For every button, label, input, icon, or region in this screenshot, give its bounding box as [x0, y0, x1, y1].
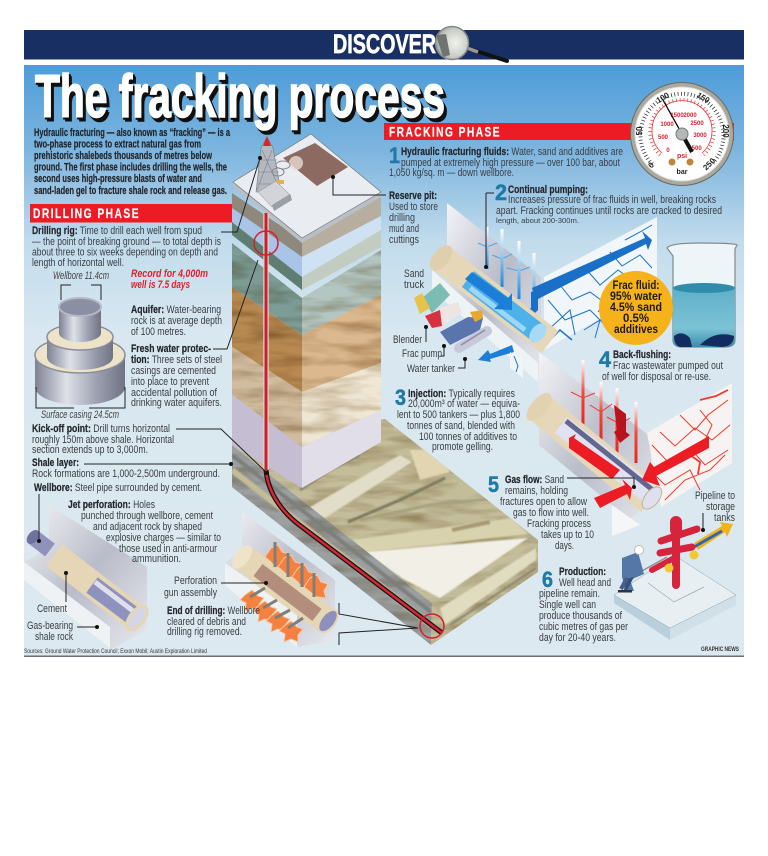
panel bottom rule: [24, 656, 744, 657]
text: drilling rig: Drilling rig: Time to drill each well from spud: [32, 225, 202, 237]
pressure gauge: 2500: [690, 121, 704, 127]
step 3: 20,000m³ of water — equiva-: [408, 398, 520, 410]
pressure gauge: 100: [655, 90, 671, 105]
shale block: [232, 419, 538, 645]
header bar: DISCOVER: [333, 29, 436, 59]
leader lines: tower: [84, 156, 418, 645]
text: aquifer: Aquifer: Water-bearing: [131, 304, 221, 316]
text: pipeline to storage tanks: storage: [706, 501, 735, 513]
header bar: [24, 29, 744, 60]
icon: frac pump: Frac pump: [402, 348, 442, 360]
text: drilling rig: — the point of breaking ground — to total depth is: [32, 236, 221, 248]
step 3: lent to 500 tankers — plus 1,800: [397, 409, 520, 421]
text: fresh water protection: [131, 343, 222, 409]
upper strata: [232, 193, 381, 290]
heading: drilling phase: DRILLING PHASE: [33, 205, 140, 221]
step 6: Well head and: [559, 577, 611, 589]
fracking diagram: blue pumping: [425, 193, 657, 382]
step 2: length, about 200-300m.: [496, 216, 579, 225]
step 5: takes up to 10: [541, 529, 594, 541]
step 5: 5: [488, 472, 499, 497]
text: aquifer: [131, 304, 222, 338]
pressure gauge: 250: [701, 156, 718, 172]
text: end of drilling: drilling rig removed.: [167, 626, 242, 638]
trucks: [393, 268, 487, 375]
step 5: gas to flow into well.: [513, 507, 589, 519]
pressure gauge: 150: [695, 91, 712, 105]
text: jet perforation: [68, 499, 221, 565]
step 6: day for 20-40 years.: [539, 632, 616, 644]
text: fresh water protection: accidental pollution of: [131, 387, 218, 399]
wellbore cutaway diagram: [24, 494, 151, 650]
perforation gun diagram: [164, 512, 342, 647]
text: fresh water protection: tion: Three sets of steel: [131, 354, 222, 366]
pressure gauge: 0: [666, 148, 670, 154]
text: fresh water protection: drinking water aquifers.: [131, 397, 222, 409]
callout: frac fluid: [599, 271, 673, 345]
step 6: pipeline remain.: [539, 588, 600, 600]
text: jet perforation: and adjacent rock by shaped: [93, 521, 202, 533]
step 5: fractures open to allow: [500, 496, 587, 508]
text: reserve pit: mud and: [389, 223, 419, 235]
text: kick-off point: roughly 150m above shale. Horizontal: [32, 434, 174, 446]
callout: frac fluid: 0.5%: [623, 311, 649, 325]
fractured rock panel red: [647, 383, 732, 507]
text: reserve pit: drilling: [389, 212, 415, 224]
step 1: 1,050 kg/sq. m — down wellbore.: [389, 167, 514, 179]
step 6: produce thousands of: [539, 610, 623, 622]
text: drilling rig: about three to six weeks depending on depth and: [32, 246, 218, 258]
step 1: 1: [389, 143, 400, 168]
casing diagram: Surface casing 24.5cm: [41, 409, 119, 421]
step 6: Production:: [559, 566, 606, 578]
step 2: Increases pressure of frac fluids in well, breaking rocks: [508, 194, 716, 206]
step 3: 3: [395, 385, 406, 410]
intro text: two-phase process to extract natural gas from: [34, 138, 201, 150]
step 4: 4: [599, 347, 612, 372]
icon: water tanker: Water tanker: [407, 363, 455, 375]
step 1: [389, 143, 623, 179]
intro text: Hydraulic fracturing — also known as “fracking” — is a: [34, 127, 231, 139]
pressure gauge: bar: [677, 169, 688, 176]
text: pipeline to storage tanks: [695, 490, 735, 524]
text: reserve pit: Reserve pit:: [389, 190, 437, 202]
icon: sand truck: Sand: [404, 268, 424, 280]
text: jet perforation: those used in anti-armour: [119, 543, 217, 555]
callout: frac fluid: 4.5% sand: [610, 300, 662, 314]
main panel background: [24, 65, 744, 656]
heading: drilling phase: [30, 204, 233, 222]
text: pipeline to storage tanks: Pipeline to: [695, 490, 735, 502]
step 6: cubic metres of gas per: [539, 621, 628, 633]
step 2: [495, 180, 722, 225]
lower strata: [232, 243, 381, 488]
text: drilling rig: [32, 225, 221, 269]
text: jet perforation: explosive charges — similar to: [106, 532, 221, 544]
step 4: Frac wastewater pumped out: [613, 360, 723, 372]
text: end of drilling: [167, 605, 260, 638]
text: shale layer: Shale layer:: [32, 457, 79, 469]
intro text: prehistoric shalebeds thousands of metres below: [34, 150, 212, 162]
step 6: Single well can: [539, 599, 596, 611]
text: shale layer: [32, 457, 220, 480]
pressure gauge: 50: [635, 126, 644, 135]
callout: frac fluid: additives: [614, 322, 658, 336]
heading: fracking phase: FRACKING PHASE: [389, 124, 501, 140]
step 3: tonnes of sand, blended with: [407, 420, 515, 432]
step 3: promote gelling.: [432, 441, 493, 453]
callout circle: aquifer: [254, 231, 278, 255]
step 4: [599, 347, 723, 383]
icon: magnifying glass: [436, 26, 507, 61]
callout: record: [131, 268, 208, 291]
well bore line: [266, 213, 442, 633]
text: reserve pit: cuttings: [389, 234, 419, 246]
icon: blender: Blender: [393, 334, 422, 346]
intro text: ground. The first phase includes drilling the wells, the: [34, 162, 227, 174]
pressure gauge: 2000: [683, 113, 697, 119]
pressure gauge: 3500: [688, 146, 702, 152]
text: kick-off point: section extends up to 3,000m.: [32, 444, 148, 456]
heading: fracking phase: [384, 123, 734, 140]
step 3: 100 tonnes of additives to: [419, 431, 517, 443]
step 1: pumped at extremely high pressure — over 100 bar, about: [401, 157, 620, 169]
step 3: [395, 385, 520, 453]
text: wellbore: Wellbore: Steel pipe surrounded by cement.: [34, 482, 202, 494]
text: jet perforation: punched through wellbore, cement: [81, 510, 213, 522]
step 1: Hydraulic fracturing fluids: Water, sand and additives are: [401, 146, 623, 158]
callout: frac fluid: Frac fluid:: [612, 278, 660, 292]
step 5: remains, holding: [505, 485, 568, 497]
icon: sand truck: truck: [404, 279, 424, 291]
step 2: Continual pumping:: [508, 184, 588, 196]
pressure gauge: 0: [646, 160, 656, 170]
step 4: Back-flushing:: [613, 349, 671, 361]
drilling rig: [256, 136, 292, 211]
intro text: sand-laden gel to fracture shale rock and release gas.: [34, 185, 227, 197]
text: fresh water protection: Fresh water protec-: [131, 343, 211, 355]
text: fresh water protection: into place to prevent: [131, 376, 209, 388]
pressure gauge: 1500: [670, 113, 684, 119]
pressure gauge: 3000: [693, 133, 707, 139]
step 4: of well for disposal or re-use.: [602, 371, 711, 383]
perforation gun diagram: Perforation: [174, 575, 217, 587]
intro text: second uses high-pressure blasts of water and: [34, 173, 202, 185]
pressure gauge: psi: [677, 153, 687, 160]
text: fresh water protection: casings are cemented: [131, 365, 216, 377]
step 6: 6: [542, 567, 553, 592]
wellbore cutaway diagram: Gas-bearing: [27, 620, 73, 632]
pressure gauge: 500: [658, 135, 669, 141]
casing diagram: [35, 270, 125, 421]
pressure gauge: 200: [721, 124, 730, 138]
text: end of drilling: cleared of debris and: [167, 616, 246, 628]
step 5: Fracking process: [527, 518, 591, 530]
text: jet perforation: ammunition.: [132, 553, 181, 565]
text: drilling rig: length of horizontal well.: [32, 257, 124, 269]
text: jet perforation: Jet perforation: Holes: [68, 499, 155, 511]
step 2: 2: [495, 180, 507, 205]
step 3: Injection: Typically requires: [408, 388, 515, 400]
step 5: [488, 472, 594, 552]
text: aquifer: of 100 metres.: [131, 326, 186, 338]
pressure gauge: 1000: [660, 122, 674, 128]
text: end of drilling: End of drilling: Wellbore: [167, 605, 260, 617]
text: reserve pit: Used to store: [389, 201, 438, 213]
perforation gun diagram: gun assembly: [164, 587, 217, 599]
sources: Sources: Ground Water Protection Council; Exxon Mobil; Austin Exploration Limited: [24, 648, 207, 655]
text: pipeline to storage tanks: tanks: [714, 512, 735, 524]
beaker: [667, 243, 737, 347]
icon: sand truck: [404, 268, 450, 314]
step 5: days.: [555, 540, 574, 552]
text: reserve pit: [389, 190, 438, 246]
production platform and well head: [614, 513, 736, 640]
step 5: Gas flow: Sand: [505, 474, 564, 486]
text: shale layer: Rock formations are 1,000-2,500m underground.: [32, 468, 220, 480]
wellbore cutaway diagram: shale rock: [35, 631, 73, 643]
intro text: [34, 127, 231, 197]
callout circle: toe of well: [420, 614, 444, 638]
title: The fracking process: [35, 63, 445, 130]
icon: worker: [618, 546, 667, 592]
credit: GRAPHIC NEWS: [701, 647, 739, 653]
text: kick-off point: Kick-off point: Drill turns horizontal: [32, 423, 170, 435]
fractured rock panel blue: [544, 217, 657, 350]
step 6: [539, 566, 628, 644]
text: kick-off point: [32, 423, 174, 456]
callout: record: well is 7.5 days: [131, 279, 190, 291]
surface pad: [233, 134, 381, 243]
wellbore cutaway diagram: Cement: [37, 603, 67, 615]
text: aquifer: rock is at average depth: [131, 315, 222, 327]
strata tower: [232, 134, 381, 488]
pressure gauge: [630, 82, 734, 186]
callout: frac fluid: 95% water: [610, 289, 662, 303]
fracking diagram: red back-flushing: [522, 352, 732, 536]
casing diagram: Wellbore 11.4cm: [53, 270, 109, 282]
callout: record: Record for 4,000m: [131, 268, 208, 280]
